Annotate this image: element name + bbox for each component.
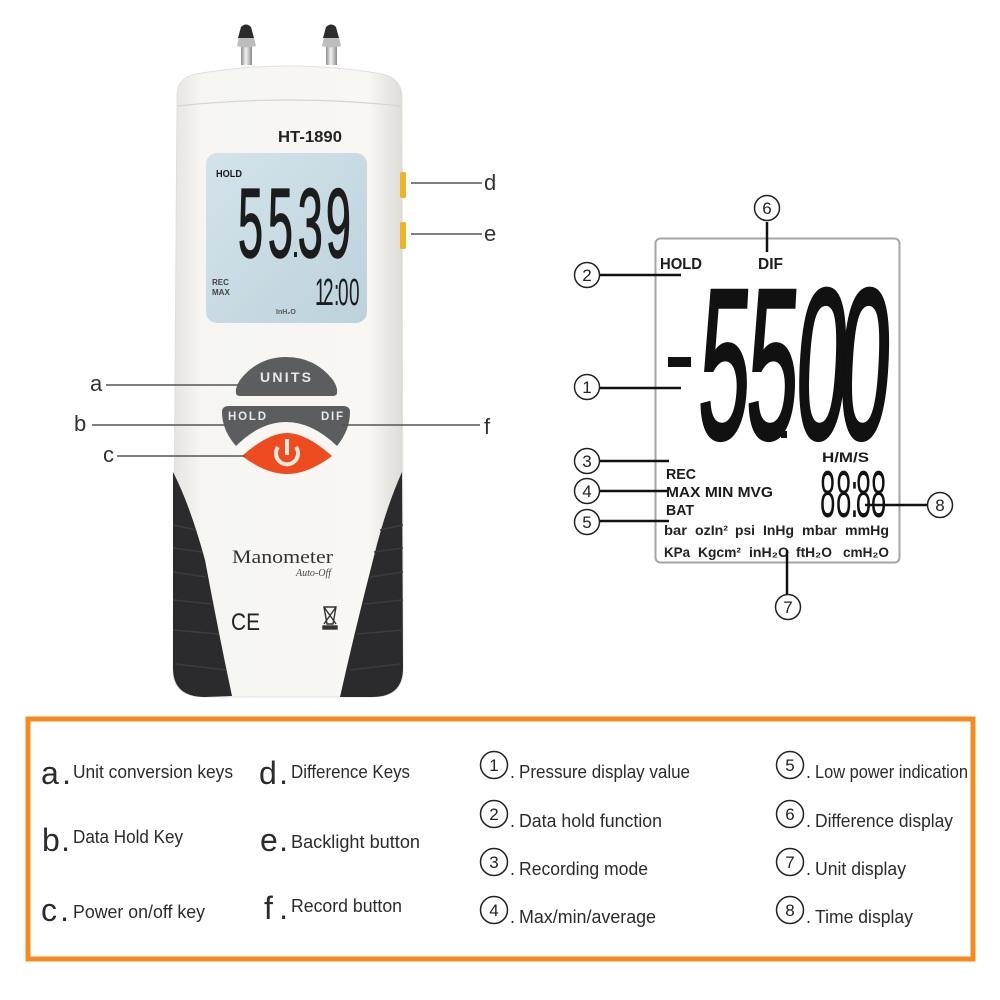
units button	[236, 357, 337, 396]
numbered callouts: 2	[582, 266, 592, 285]
legend column: items 1-4: 3	[489, 853, 499, 872]
screen reading: 5539	[238, 170, 351, 279]
unit row one: InHg	[763, 522, 794, 538]
unit row two: Kgcm²	[698, 544, 741, 560]
legend column: items 5-8	[776, 752, 968, 927]
device screen: InH₂O	[276, 309, 296, 316]
legend column: items 5-8: 5	[785, 756, 795, 775]
legend column: keys d-f: e.	[260, 822, 288, 858]
legend border	[28, 719, 973, 959]
screen decimal point	[294, 252, 297, 257]
time display: 88:88	[820, 457, 886, 531]
legend column: items 1-4	[480, 752, 690, 927]
legend column: keys d-f: f.	[264, 890, 288, 926]
legend column: keys a-c	[41, 755, 233, 928]
unit row one	[664, 522, 889, 538]
icon: left pressure port	[237, 24, 256, 65]
hold indicator: HOLD	[660, 256, 702, 273]
icon: button d	[400, 172, 406, 198]
legend column: items 5-8: Difference display	[815, 811, 953, 831]
time header: H/M/S	[822, 449, 869, 465]
legend column: items 1-4: .	[510, 811, 515, 831]
auto-off text: Auto-Off	[295, 568, 332, 579]
device body	[173, 66, 403, 697]
callout lines and letters for device: a	[90, 371, 103, 396]
legend column: keys d-f: Difference Keys	[291, 762, 410, 782]
unit row two: inH₂O	[749, 544, 789, 560]
legend column: items 5-8: .	[806, 859, 811, 879]
legend column: items 1-4: 2	[489, 805, 499, 824]
left rubber grip	[173, 472, 232, 697]
main reading: 5500	[694, 245, 897, 483]
manometer device	[173, 24, 406, 697]
legend column: items 5-8: .	[806, 811, 811, 831]
legend column: items 5-8: 7	[785, 853, 795, 872]
numbered callouts: 7	[783, 598, 793, 617]
device screen: REC	[212, 278, 229, 287]
numbered callouts	[574, 196, 952, 620]
right rubber grip	[340, 472, 403, 697]
callout lines and letters for device	[74, 170, 496, 467]
unit row one: psi	[735, 522, 755, 538]
legend column: items 5-8: .	[806, 907, 811, 927]
hold and dif buttons	[222, 406, 350, 446]
icon: button e	[400, 222, 406, 249]
dif indicator: DIF	[758, 256, 783, 273]
CE mark: CE	[231, 609, 260, 636]
numbered callouts: 5	[582, 513, 592, 532]
callout lines and letters for device: e	[484, 221, 496, 246]
LCD frame	[656, 238, 900, 562]
icon: right pressure port	[322, 24, 341, 65]
legend column: keys d-f: Backlight button	[291, 832, 420, 852]
legend column: items 5-8: 6	[785, 805, 795, 824]
units button: UNITS	[260, 369, 311, 385]
legend column: keys a-c: Data Hold Key	[73, 827, 183, 847]
power button	[242, 433, 332, 474]
legend column: items 5-8: Unit display	[815, 859, 906, 879]
device screen	[206, 153, 367, 323]
legend column: items 1-4: Max/min/average	[519, 907, 656, 927]
brand name: Manometer	[232, 548, 333, 568]
LCD diagram	[656, 238, 900, 562]
icon: recycling bin mark	[323, 607, 337, 629]
legend column: keys d-f: d.	[259, 755, 288, 791]
callout lines and letters for device: b	[74, 411, 86, 436]
unit row two	[664, 544, 889, 560]
numbered callouts: 1	[582, 378, 592, 397]
device screen: HOLD	[216, 168, 242, 180]
legend column: keys a-c: Unit conversion keys	[73, 762, 233, 782]
device seam	[177, 100, 401, 106]
legend column: keys a-c: b.	[42, 822, 70, 858]
legend column: items 1-4: Pressure display value	[519, 762, 690, 782]
screen clock: 12:00	[315, 272, 360, 314]
status labels: REC	[666, 466, 696, 483]
legend column: keys a-c: Power on/off key	[73, 902, 205, 922]
legend column: items 5-8: Time display	[815, 907, 913, 927]
battery label: BAT	[666, 502, 694, 519]
unit row one: ozIn²	[695, 522, 728, 538]
legend column: items 5-8: .	[806, 762, 811, 782]
device screen: MAX	[212, 288, 230, 297]
legend column: items 5-8: Low power indication	[815, 762, 968, 782]
hold and dif buttons: HOLD	[228, 411, 266, 423]
legend column: items 1-4: .	[510, 859, 515, 879]
panel: legend	[28, 719, 973, 959]
legend column: items 1-4: .	[510, 762, 515, 782]
legend column: keys a-c: c.	[41, 892, 69, 928]
legend column: items 5-8: 8	[785, 901, 795, 920]
legend column: keys d-f	[259, 755, 420, 926]
callout lines and letters for device: f	[484, 414, 491, 439]
hold and dif buttons: DIF	[321, 411, 343, 423]
numbered callouts: 8	[935, 496, 945, 515]
legend column: items 1-4: .	[510, 907, 515, 927]
mode labels: MAX MIN MVG	[666, 484, 773, 501]
legend column: items 1-4: Data hold function	[519, 811, 662, 831]
unit row one: bar	[664, 522, 688, 538]
legend column: items 1-4: 1	[489, 756, 499, 775]
legend column: items 1-4: Recording mode	[519, 859, 648, 879]
unit row two: ftH₂O	[796, 544, 832, 560]
numbered callouts: 6	[762, 199, 772, 218]
unit row one: mmHg	[845, 522, 889, 538]
callout lines and letters for device: c	[103, 442, 114, 467]
model name: HT-1890	[278, 129, 342, 146]
legend column: keys d-f: Record button	[291, 896, 402, 916]
unit row one: mbar	[802, 522, 838, 538]
legend column: keys a-c: a.	[41, 755, 71, 791]
numbered callouts: 3	[582, 452, 592, 471]
callout lines and letters for device: d	[484, 170, 496, 195]
legend column: items 1-4: 4	[489, 901, 499, 920]
unit row two: KPa	[664, 544, 690, 560]
numbered callouts: 4	[582, 482, 592, 501]
unit row two: cmH₂O	[843, 544, 889, 560]
